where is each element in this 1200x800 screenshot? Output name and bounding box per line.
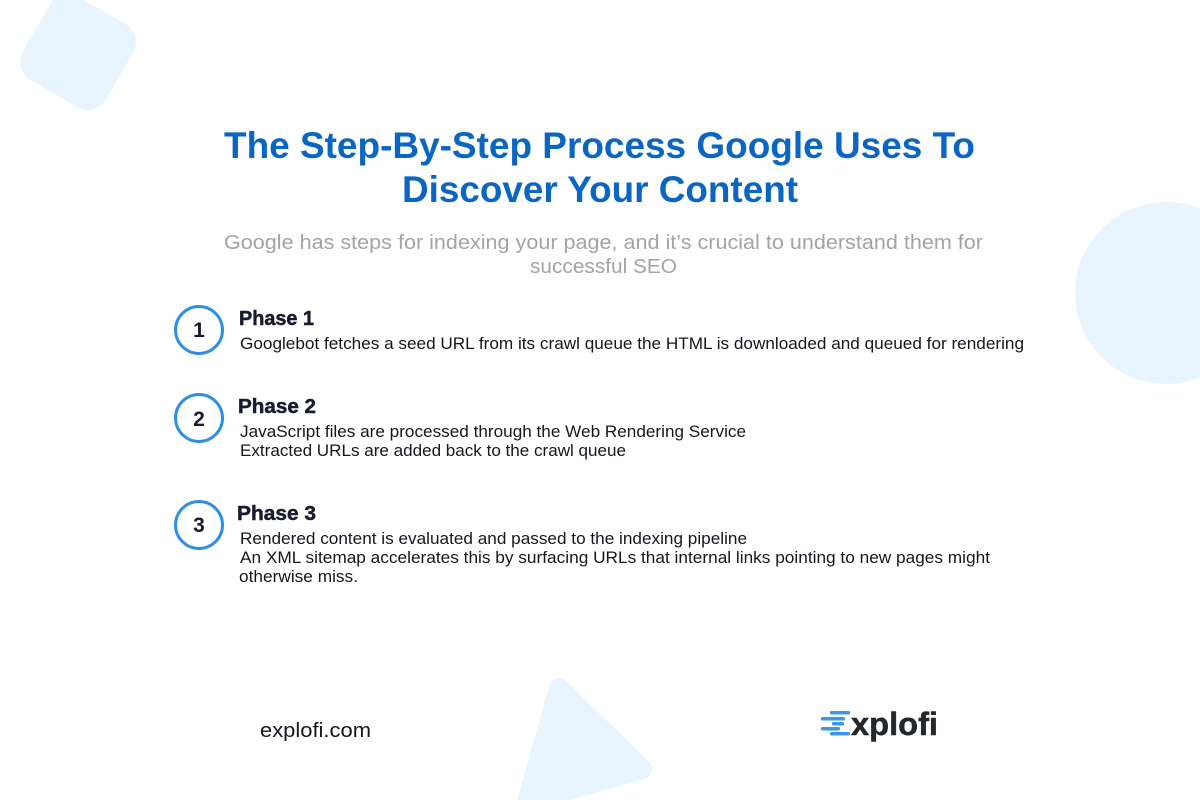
text: phase 2 description: JavaScript files are processed through the Web Rendering Service: [240, 423, 746, 441]
heading: phase 1: Phase 1: [239, 307, 314, 330]
subtitle: Google has steps for indexing your page, and it’s crucial to understand them for: [224, 231, 983, 254]
background shape: circle: [1075, 202, 1200, 384]
heading: phase 3: Phase 3: [237, 502, 316, 525]
background shape: rounded square: [12, 0, 144, 118]
text: phase 1 description: Googlebot fetches a seed URL from its crawl queue the HTML is downloaded and queued for rendering: [240, 335, 1024, 353]
panel: phase 3: [176, 502, 990, 586]
text: phase 2 description: [240, 423, 746, 460]
subtitle: successful SEO: [530, 255, 677, 278]
text: phase 2 description: Extracted URLs are added back to the crawl queue: [240, 442, 626, 460]
text: phase 3 description: [239, 530, 990, 586]
icon: number 3 badge: 3: [193, 514, 205, 537]
text: phase 3 description: An XML sitemap accelerates this by surfacing URLs that internal links pointing to new pages might: [240, 549, 990, 567]
logo wordmark: xplofi: [851, 706, 938, 742]
text: phase 3 description: otherwise miss.: [239, 568, 358, 586]
heading: phase 2: Phase 2: [238, 395, 316, 418]
panel: phase 1: [176, 306, 1024, 354]
icon: number 2 badge: [176, 394, 222, 442]
subtitle: [224, 231, 983, 278]
icon: number 3 badge: [176, 502, 222, 548]
icon: number 2 badge: 2: [193, 408, 205, 431]
background shape: triangle: [527, 688, 642, 800]
title: [224, 125, 975, 210]
panel: phase 2: [176, 394, 746, 460]
logo: explofi: [821, 706, 938, 742]
text: phase 3 description: Rendered content is evaluated and passed to the indexing pipeline: [240, 530, 747, 548]
title: Discover Your Content: [402, 169, 798, 210]
icon: number 1 badge: 1: [193, 319, 205, 342]
icon: number 1 badge: [176, 306, 222, 354]
website address: explofi.com: [260, 719, 371, 742]
icon: logo bars: [821, 711, 850, 736]
title: The Step-By-Step Process Google Uses To: [224, 125, 975, 166]
